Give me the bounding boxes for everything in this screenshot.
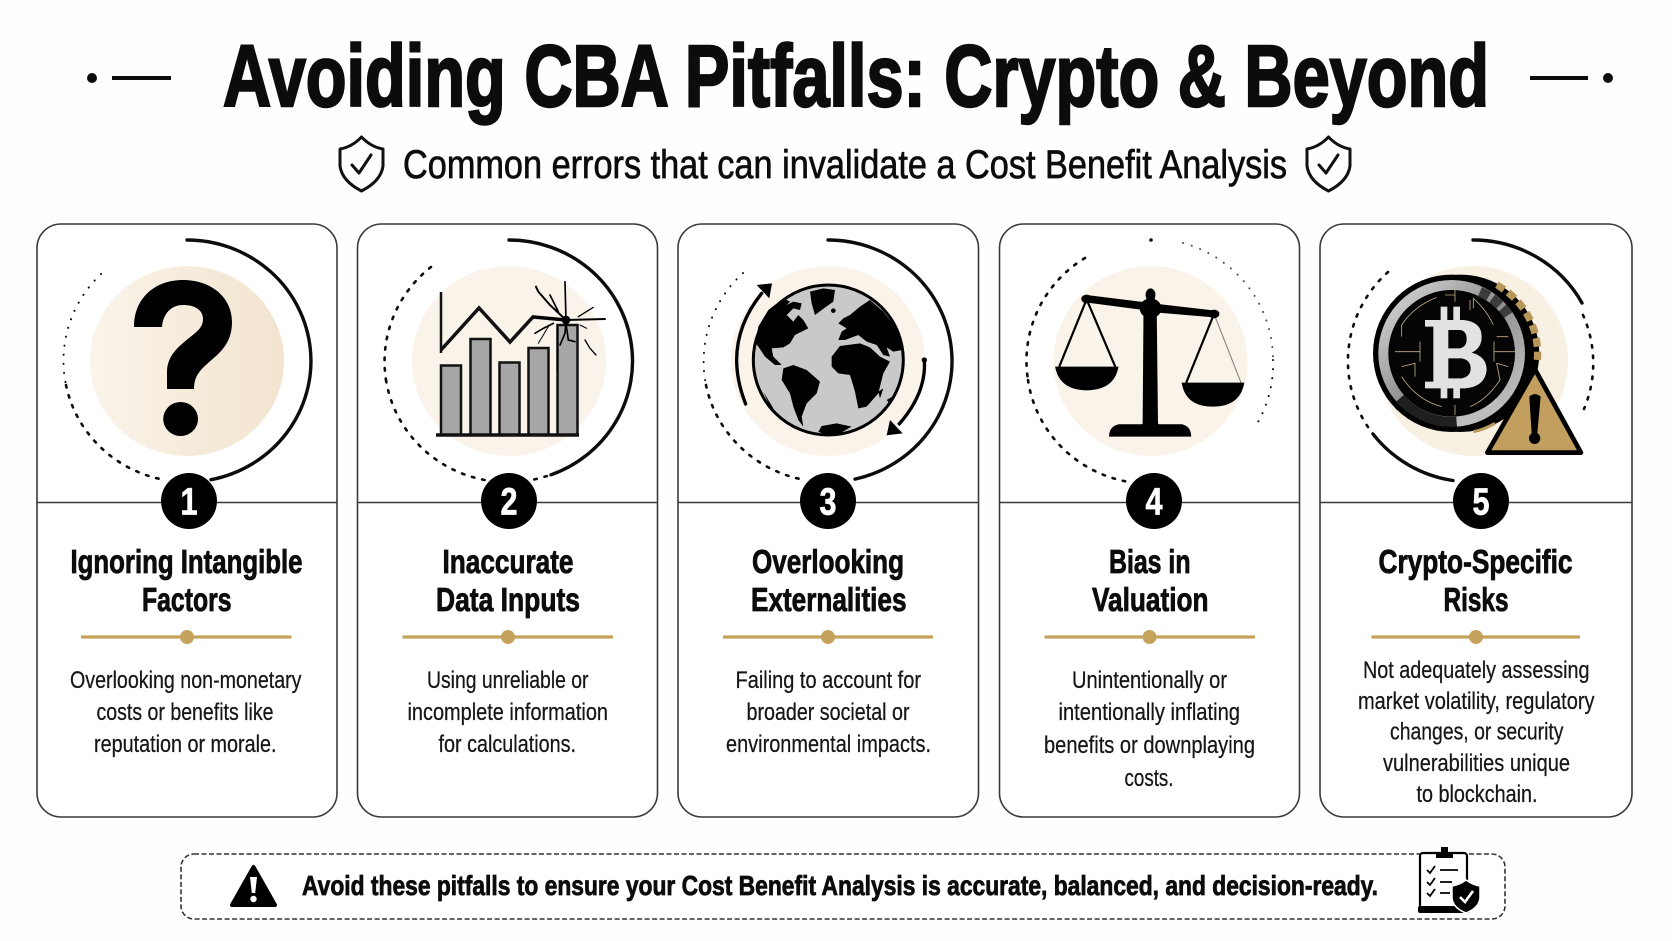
description: broader societal or [746, 699, 910, 726]
gold separator [1044, 630, 1255, 644]
panel: crypto-specific risks [1320, 224, 1632, 817]
icon: question mark [63, 240, 311, 480]
description: benefits or downplaying [1044, 732, 1255, 759]
heading: Factors [142, 581, 232, 618]
number badge 4: 4 [1146, 482, 1162, 524]
number badge 5 [1453, 473, 1509, 529]
description: Not adequately assessing [1363, 657, 1590, 684]
heading: Crypto-Specific [1378, 543, 1572, 580]
number badge 5: 5 [1472, 482, 1490, 524]
title decoration: left [87, 73, 171, 83]
heading: Inaccurate [442, 543, 574, 580]
number badge 3: 3 [820, 482, 836, 524]
description: Unintentionally or [1072, 667, 1227, 694]
number badge 2: 2 [500, 482, 518, 524]
description [1044, 667, 1255, 792]
description: Overlooking non-monetary [70, 667, 302, 694]
icon: globe with arrows [704, 240, 952, 480]
description: vulnerabilities unique [1383, 750, 1570, 777]
heading: Bias in [1109, 543, 1190, 580]
icon: warning triangle [232, 867, 275, 905]
heading: Data Inputs [436, 581, 580, 618]
gold separator [723, 630, 933, 644]
subtitle: Common errors that can invalidate a Cost Benefit Analysis [403, 143, 1287, 187]
panel: ignoring intangible factors [37, 224, 337, 817]
description [70, 667, 302, 758]
icon: cracked bar chart [385, 240, 633, 482]
panel: bias in valuation [1000, 224, 1300, 817]
description: environmental impacts. [726, 731, 931, 758]
number badge 3 [800, 473, 856, 529]
gold separator [402, 630, 613, 644]
description: costs. [1124, 765, 1174, 792]
icon: left shield [340, 137, 383, 191]
heading [70, 543, 302, 618]
number badge 2 [481, 473, 537, 529]
description: intentionally inflating [1058, 699, 1240, 726]
number badge 4 [1126, 473, 1182, 529]
description: for calculations. [438, 731, 576, 758]
heading: Ignoring Intangible [70, 543, 302, 580]
heading [751, 543, 906, 618]
panel: inaccurate data inputs [358, 224, 658, 817]
description [408, 667, 608, 758]
gold separator [1372, 630, 1580, 644]
icon: right shield [1307, 137, 1350, 191]
description: Using unreliable or [427, 667, 589, 694]
description: incomplete information [408, 699, 608, 726]
gold separator [81, 630, 292, 644]
heading [436, 543, 580, 618]
icon: clipboard with shield [1418, 847, 1480, 913]
description: changes, or security [1390, 718, 1564, 746]
description: reputation or morale. [94, 731, 276, 758]
panel: overlooking externalities [678, 224, 978, 817]
heading [1378, 543, 1572, 618]
icon: balance scales [1026, 238, 1273, 482]
description [726, 667, 931, 758]
heading: Externalities [751, 581, 906, 618]
description: costs or benefits like [96, 699, 274, 726]
callout: bottom banner [181, 847, 1505, 919]
icon: bitcoin coin with warning [1348, 240, 1593, 480]
heading: Risks [1444, 581, 1508, 618]
heading: Valuation [1092, 581, 1208, 618]
number badge 1: 1 [180, 482, 198, 524]
description: to blockchain. [1416, 781, 1538, 808]
heading [1092, 543, 1208, 618]
number badge 1 [161, 473, 217, 529]
description: Failing to account for [736, 667, 921, 694]
title decoration: right [1530, 73, 1613, 83]
banner text: Avoid these pitfalls to ensure your Cost Benefit Analysis is accurate, balanced, and decision-ready. [302, 870, 1378, 901]
description: market volatility, regulatory [1358, 688, 1594, 715]
description [1358, 657, 1594, 808]
heading: Overlooking [752, 543, 904, 580]
